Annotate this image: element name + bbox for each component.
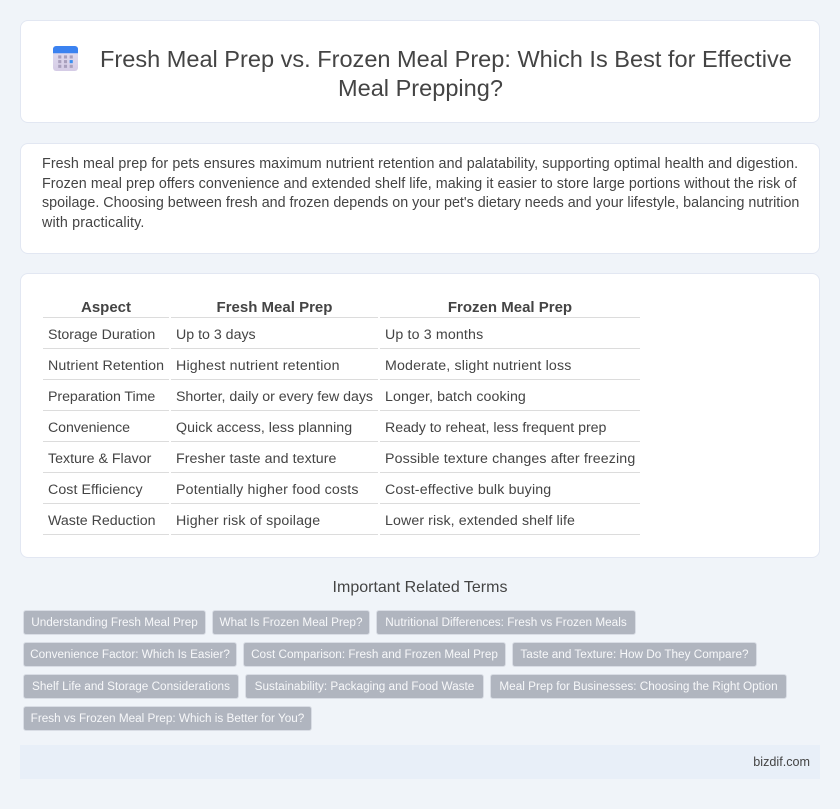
icon: calendar xyxy=(53,46,78,71)
row: nutrient retention: Nutrient Retention xyxy=(48,358,164,374)
row: convenience xyxy=(43,420,640,442)
tag: Shelf Life and Storage Considerations xyxy=(32,680,230,693)
row: cost efficiency: Cost-effective bulk buying xyxy=(385,482,551,498)
tag xyxy=(512,642,757,667)
row: storage duration xyxy=(43,327,640,349)
tag: Convenience Factor: Which Is Easier? xyxy=(30,648,230,661)
row: texture and flavor: Possible texture changes after freezing xyxy=(385,451,635,467)
tag: Sustainability: Packaging and Food Waste xyxy=(255,680,474,693)
row: cost efficiency: Potentially higher food costs xyxy=(176,482,359,498)
text block: introduction xyxy=(42,156,799,230)
tag: Cost Comparison: Fresh and Frozen Meal Prep xyxy=(251,648,498,661)
panel: introduction xyxy=(20,143,820,254)
tag: Understanding Fresh Meal Prep xyxy=(31,616,198,629)
tag xyxy=(23,706,312,731)
text block: introduction: Frozen meal prep offers convenience and extended shelf life, making it easier to store large portions without the risk of xyxy=(42,176,796,192)
tag xyxy=(23,610,206,635)
row: texture and flavor: Fresher taste and texture xyxy=(176,451,337,467)
row: convenience: Convenience xyxy=(48,420,130,436)
tag xyxy=(243,642,506,667)
row: convenience: Ready to reheat, less frequent prep xyxy=(385,420,606,436)
row: storage duration: Storage Duration xyxy=(48,327,155,343)
footer bar xyxy=(20,745,820,779)
row: storage duration: Up to 3 days xyxy=(176,327,256,343)
tag xyxy=(490,674,787,699)
comparison table xyxy=(43,298,640,535)
tag: Meal Prep for Businesses: Choosing the Right Option xyxy=(499,680,778,693)
title xyxy=(100,46,792,101)
row: preparation time: Preparation Time xyxy=(48,389,155,405)
table header: Frozen Meal Prep xyxy=(448,298,572,316)
panel: comparison table xyxy=(20,273,820,558)
row: cost efficiency xyxy=(43,482,640,504)
tag xyxy=(376,610,636,635)
text block: introduction: with practicality. xyxy=(42,214,145,230)
row: waste reduction: Waste Reduction xyxy=(48,513,156,529)
row: texture and flavor xyxy=(43,451,640,473)
tag: Fresh vs Frozen Meal Prep: Which is Better for You? xyxy=(31,712,304,725)
tag: Taste and Texture: How Do They Compare? xyxy=(520,648,749,661)
row: preparation time: Longer, batch cooking xyxy=(385,389,526,405)
table header xyxy=(43,298,640,318)
tag xyxy=(23,674,239,699)
row: cost efficiency: Cost Efficiency xyxy=(48,482,143,498)
title: Meal Prepping? xyxy=(338,75,503,101)
related term tags xyxy=(23,610,787,731)
tag xyxy=(212,610,370,635)
heading: important related terms: Important Related Terms xyxy=(333,579,507,596)
row: texture and flavor: Texture & Flavor xyxy=(48,451,151,467)
title: Fresh Meal Prep vs. Frozen Meal Prep: Which Is Best for Effective xyxy=(100,46,792,72)
panel: title header xyxy=(20,20,820,123)
row: nutrient retention xyxy=(43,358,640,380)
footer credit: bizdif.com xyxy=(753,755,810,769)
text block: introduction: Fresh meal prep for pets ensures maximum nutrient retention and palatability, supporting optimal health and digestion. xyxy=(42,156,798,172)
row: waste reduction: Higher risk of spoilage xyxy=(176,513,320,529)
row: nutrient retention: Moderate, slight nutrient loss xyxy=(385,358,571,374)
tag xyxy=(245,674,484,699)
tag xyxy=(23,642,237,667)
row: preparation time: Shorter, daily or every few days xyxy=(176,389,373,405)
text block: introduction: spoilage. Choosing between fresh and frozen depends on your pet's dietary needs and your lifestyle, balancing nutrition xyxy=(42,195,799,211)
row: nutrient retention: Highest nutrient retention xyxy=(176,358,340,374)
table header: Fresh Meal Prep xyxy=(217,298,332,316)
row: waste reduction: Lower risk, extended shelf life xyxy=(385,513,575,529)
row: preparation time xyxy=(43,389,640,411)
row: convenience: Quick access, less planning xyxy=(176,420,352,436)
table header: Aspect xyxy=(81,298,131,316)
tag: What Is Frozen Meal Prep? xyxy=(219,616,362,629)
row: storage duration: Up to 3 months xyxy=(385,327,483,343)
tag: Nutritional Differences: Fresh vs Frozen Meals xyxy=(385,616,627,629)
row: waste reduction xyxy=(43,513,640,535)
